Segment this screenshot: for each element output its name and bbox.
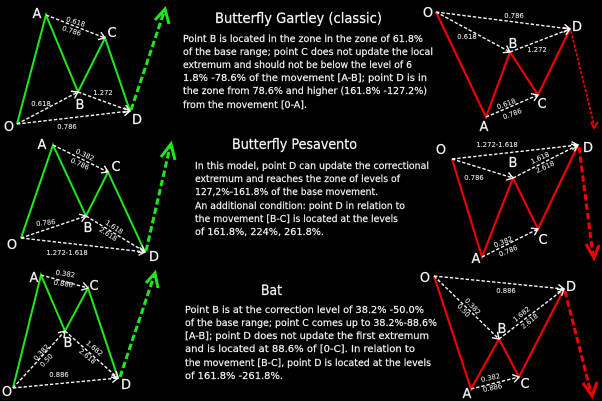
heading: Butterfly Pesavento — [232, 137, 357, 153]
panel: bullish Pesavento chart — [7, 138, 175, 265]
ratio labels: 2.618 — [520, 312, 540, 331]
point labels: C — [111, 160, 121, 175]
ratio arrows — [452, 145, 578, 257]
point labels — [423, 6, 582, 135]
ratio labels — [32, 269, 104, 379]
ratio labels: 0.786 — [57, 123, 77, 131]
ratio labels: 0.886 — [482, 382, 503, 394]
text block: 1.8% -78.6% of the movement [A-B]; point D is in — [183, 73, 427, 84]
panel: Gartley description — [183, 11, 433, 111]
point labels — [4, 7, 142, 135]
point labels: O — [423, 6, 433, 21]
point labels: B — [509, 156, 517, 171]
pattern line: red zigzag — [434, 276, 564, 389]
text block: of the base range; point C comes up to 38.2%-88.6% — [185, 318, 437, 329]
point labels: C — [520, 377, 530, 392]
point labels — [420, 271, 576, 401]
point labels: A — [38, 138, 47, 153]
ratio labels: 0.382 — [55, 269, 75, 279]
text block: the movement [B-C] is located at the levels — [195, 214, 398, 225]
heading: Butterfly Gartley (classic) — [215, 11, 382, 27]
text block — [195, 161, 429, 238]
ratio labels: 0.618 — [65, 15, 86, 29]
arrow: expected rise — [131, 9, 169, 110]
ratio labels: 0.382 — [493, 235, 514, 250]
pattern line: green zigzag — [17, 15, 130, 124]
ratio labels: 0.786 — [61, 24, 82, 38]
ratio labels: 0.886 — [53, 279, 73, 289]
point labels — [2, 271, 131, 400]
ratio labels: 2.618 — [98, 226, 118, 243]
ratio arrows — [21, 145, 145, 252]
text block: [A-B]; point D does not update the first extremum — [185, 331, 429, 342]
ratio labels: 0.786 — [498, 244, 519, 259]
panel: Pesavento description — [195, 137, 429, 238]
ratio labels: 2.618 — [535, 159, 556, 175]
ratio labels: 0.50 — [38, 352, 55, 369]
pattern line: red zigzag — [436, 12, 570, 117]
pattern line: red zigzag — [452, 145, 578, 257]
point labels: A — [480, 120, 489, 135]
point labels: C — [107, 26, 117, 41]
ratio labels — [31, 15, 113, 131]
point labels: B — [76, 98, 84, 113]
pattern line: green zigzag — [13, 275, 118, 388]
ratio labels: 0.786 — [36, 218, 56, 228]
ratio labels: 0.618 — [31, 100, 51, 108]
panel: bullish Gartley chart — [4, 7, 169, 135]
ratio labels: 1.618 — [530, 150, 551, 166]
point labels: D — [132, 113, 142, 128]
text block: the movement [B-C], point D is located at the levels — [185, 358, 431, 369]
ratio arrows — [13, 275, 118, 388]
point labels: O — [4, 120, 14, 135]
text block: of 161.8%, 224%, 261.8%. — [195, 227, 324, 238]
point labels: A — [472, 252, 481, 267]
ratio labels — [36, 148, 124, 257]
ratio labels: 0.618 — [457, 33, 477, 41]
point labels: D — [149, 250, 159, 265]
point labels: D — [121, 378, 131, 393]
arrow: expected fall — [571, 31, 598, 128]
text block: from the movement [0-A]. — [183, 100, 307, 111]
ratio arrows — [436, 12, 570, 117]
ratio labels: 0.382 — [74, 148, 95, 163]
text block: Point B is located in the zone in the zone of 61.8% — [183, 34, 423, 45]
ratio labels: 1.272-1.618 — [46, 249, 88, 257]
ratio labels: 0.382 — [480, 372, 501, 384]
text block: of 161.8% -261.8%. — [185, 371, 283, 382]
point labels: B — [64, 336, 72, 351]
ratio labels: 0.382 — [32, 343, 51, 362]
point labels: D — [583, 141, 593, 156]
arrow: expected fall — [579, 147, 599, 258]
point labels: O — [436, 143, 446, 158]
arrow: expected rise — [146, 144, 175, 251]
panel: bearish Gartley chart — [423, 6, 598, 135]
point labels: O — [7, 238, 17, 253]
ratio labels: 1.272-1.618 — [476, 141, 518, 149]
ratio labels: 1.618 — [104, 219, 124, 236]
ratio arrows — [434, 276, 564, 389]
text block — [185, 305, 437, 382]
ratio labels: 0.618 — [496, 97, 517, 111]
arrow: expected rise — [120, 273, 158, 377]
text block — [183, 34, 433, 111]
point labels: O — [420, 271, 430, 286]
ratio labels: 1.682 — [84, 339, 104, 358]
text block: extremum and reaches the zone of levels of — [195, 174, 401, 185]
ratio labels: 1.682 — [512, 305, 532, 324]
text block: An additional condition: point D in relation to — [195, 201, 405, 212]
panel: bearish Bat chart — [420, 271, 597, 401]
point labels: C — [89, 279, 99, 294]
ratio labels: 0.786 — [502, 107, 523, 121]
text block: extremum and should not be below the level of 6 — [183, 60, 412, 71]
text block: the zone from 78.6% and higher (161.8% -127.2%) — [183, 86, 427, 97]
point labels — [436, 141, 593, 267]
point labels: C — [538, 233, 548, 248]
point labels — [7, 138, 159, 265]
panel: bearish Pesavento chart — [436, 141, 599, 267]
point labels: A — [30, 271, 39, 286]
ratio labels: 2.618 — [77, 347, 97, 366]
text block: and is located at 88.6% of [0-C]. In relation to — [185, 344, 415, 355]
text block: 127,2%-161.8% of the base movement. — [195, 187, 378, 198]
ratio labels: 0.786 — [69, 157, 90, 172]
point labels: B — [498, 322, 506, 337]
ratio labels: 0.786 — [464, 174, 484, 182]
panel: Bat description — [185, 283, 437, 382]
ratio labels: 0.886 — [496, 287, 516, 295]
point labels: A — [33, 7, 42, 22]
ratio labels — [455, 287, 540, 394]
heading: Bat — [261, 283, 282, 299]
point labels: O — [2, 385, 12, 400]
ratio labels: 1.272 — [93, 89, 113, 97]
text block: In this model, point D can update the correctional — [195, 161, 429, 172]
text block: of the base range; point C does not update the local — [183, 47, 433, 58]
pattern line: green zigzag — [21, 145, 145, 252]
ratio arrows — [17, 15, 130, 124]
point labels: D — [572, 20, 582, 35]
ratio labels: 1.272 — [527, 46, 547, 54]
ratio labels: 0.886 — [49, 371, 69, 379]
point labels: D — [566, 280, 576, 295]
panel: bullish Bat chart — [2, 269, 158, 400]
ratio labels: 0.382 — [463, 297, 482, 316]
arrow: expected fall — [565, 291, 597, 396]
point labels: C — [537, 97, 547, 112]
ratio labels — [464, 141, 556, 259]
text block: Point B is at the correction level of 38.2% -50.0% — [185, 305, 424, 316]
ratio labels — [457, 12, 547, 121]
ratio labels: 0.50 — [455, 302, 472, 319]
point labels: B — [509, 37, 517, 52]
point labels: B — [84, 221, 92, 236]
ratio labels: 0.786 — [504, 12, 524, 20]
